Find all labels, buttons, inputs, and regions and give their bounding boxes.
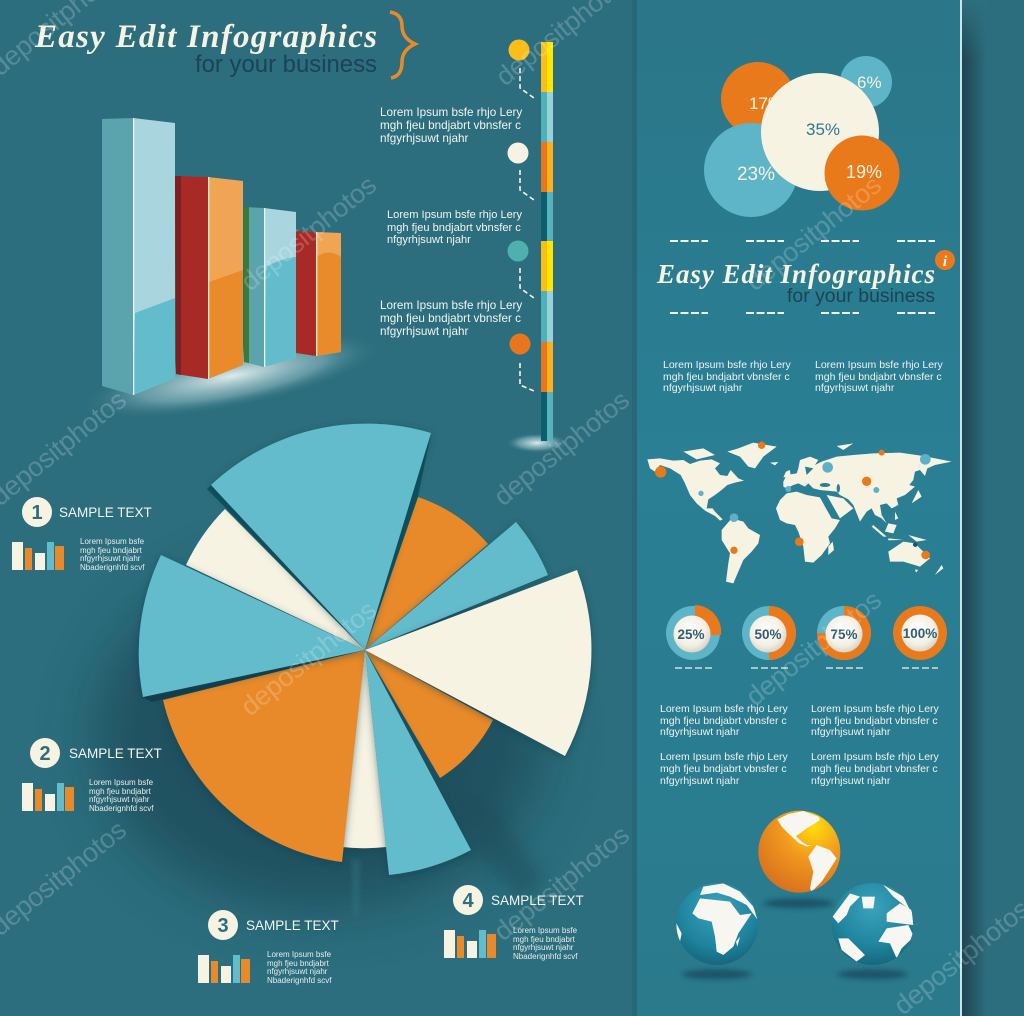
sample 2: mgh fjeu bndjabrt [89, 787, 152, 796]
donut 100% [893, 606, 947, 660]
bubble chart: 6% [857, 73, 882, 92]
panel text 2: Lorem Ipsum bsfe rhjo Lery [815, 359, 944, 371]
slice: top blue [211, 424, 431, 650]
panel text 3 [660, 703, 789, 738]
icon: info [935, 250, 955, 270]
panel text 6 [811, 751, 940, 787]
panel text 4 [811, 703, 940, 738]
timeline text 1 [380, 106, 522, 145]
sample 3: Nbaderignhfd scvf [267, 976, 332, 985]
timeline text 3: Lorem Ipsum bsfe rhjo Lery [380, 299, 522, 312]
donut 75% [817, 606, 871, 660]
sample 3: 3 [217, 915, 229, 937]
sample 3: Lorem Ipsum bsfe [267, 950, 332, 959]
slice: bottom blue [365, 650, 471, 875]
sample 2: 2 [39, 743, 51, 765]
sample 2: Lorem Ipsum bsfe [89, 778, 154, 787]
bar 4 [296, 231, 341, 356]
sample 4: 4 [462, 890, 474, 912]
title right: Easy Edit Infographics [656, 259, 935, 289]
timeline text 2 [387, 209, 522, 246]
pie shadow [95, 560, 545, 915]
globes [676, 811, 914, 979]
bubble chart [704, 56, 900, 217]
sample 2 [22, 738, 162, 813]
timeline text 3: nfgyrhjsuwt njahr [380, 325, 468, 338]
panel text 2 [815, 359, 944, 394]
bar 2 [175, 176, 243, 379]
title right [656, 259, 935, 307]
sample 4: mgh fjeu bndjabrt [513, 935, 576, 944]
watermarks: depositphotos [488, 820, 635, 947]
panel text 5: mgh fjeu bndjabrt vbnsfer c [660, 763, 787, 775]
bubble chart: 17% [749, 94, 783, 113]
sample 2: nfgyrhjsuwt njahr [89, 795, 150, 804]
globe: orange [758, 811, 840, 893]
panel text 1 [663, 359, 792, 394]
panel text 2: mgh fjeu bndjabrt vbnsfer c [815, 371, 942, 383]
sample 4 [444, 885, 584, 961]
right panel [632, 0, 988, 1016]
sample 1: nfgyrhjsuwt njahr [80, 554, 141, 563]
brace icon [390, 12, 415, 78]
timeline text 1: mgh fjeu bndjabrt vbnsfer c [380, 119, 521, 132]
sample 1: 1 [31, 502, 43, 524]
sample 1: Nbaderignhfd scvf [80, 563, 145, 572]
panel text 1: nfgyrhjsuwt njahr [663, 382, 743, 394]
timeline [505, 40, 569, 453]
panel text 6: mgh fjeu bndjabrt vbnsfer c [811, 763, 938, 775]
timeline bar [541, 42, 553, 441]
sample 4: Lorem Ipsum bsfe [513, 926, 578, 935]
bubble chart: 35% [806, 120, 840, 139]
panel text 3: mgh fjeu bndjabrt vbnsfer c [660, 715, 787, 727]
sample 2: Nbaderignhfd scvf [89, 804, 154, 813]
3D bar chart [74, 118, 390, 437]
sample 4: Nbaderignhfd scvf [513, 952, 578, 961]
donut 100%: 100% [903, 626, 937, 641]
watermarks: depositphotos [488, 385, 635, 512]
icon: info: i [943, 254, 948, 270]
watermarks: depositphotos [740, 585, 887, 712]
watermarks: depositphotos [235, 170, 382, 297]
panel text 6: nfgyrhjsuwt njahr [811, 775, 891, 787]
timeline text 3: mgh fjeu bndjabrt vbnsfer c [380, 312, 521, 325]
donut 25%: 25% [677, 627, 705, 642]
globe: left blue [676, 883, 758, 965]
sample 3: mgh fjeu bndjabrt [267, 959, 330, 968]
sample 1 [12, 497, 152, 572]
panel text 3: nfgyrhjsuwt njahr [660, 726, 740, 738]
watermarks: depositphotos [235, 595, 382, 722]
title left [34, 19, 377, 78]
map markers [655, 442, 931, 559]
timeline text 1: Lorem Ipsum bsfe rhjo Lery [380, 106, 522, 119]
title left: for your business [195, 51, 377, 78]
world map [647, 442, 952, 583]
panel text 5 [660, 751, 789, 787]
dashed rules [670, 241, 935, 313]
globe: right blue [832, 883, 914, 965]
panel text 1: mgh fjeu bndjabrt vbnsfer c [663, 371, 790, 383]
timeline text 2: Lorem Ipsum bsfe rhjo Lery [387, 209, 522, 221]
title left: Easy Edit Infographics [34, 19, 377, 55]
panel text 3: Lorem Ipsum bsfe rhjo Lery [660, 703, 789, 715]
timeline text 3 [380, 299, 522, 338]
sample 4: nfgyrhjsuwt njahr [513, 943, 574, 952]
watermarks: depositphotos [740, 170, 887, 297]
bubble chart: 19% [846, 162, 882, 182]
slice: right cream [365, 570, 591, 756]
sample 3: SAMPLE TEXT [246, 918, 339, 933]
sample 1: SAMPLE TEXT [59, 505, 152, 520]
donut dashes [675, 667, 938, 669]
panel text 5: Lorem Ipsum bsfe rhjo Lery [660, 751, 789, 763]
donut 75%: 75% [830, 627, 858, 642]
sample 1: Lorem Ipsum bsfe [80, 537, 145, 546]
panel text 5: nfgyrhjsuwt njahr [660, 775, 740, 787]
donut 25% [666, 605, 721, 660]
sample 3 [198, 910, 339, 985]
panel text 6: Lorem Ipsum bsfe rhjo Lery [811, 751, 940, 763]
panel text 2: nfgyrhjsuwt njahr [815, 382, 895, 394]
timeline text 2: nfgyrhjsuwt njahr [387, 234, 471, 246]
panel text 4: nfgyrhjsuwt njahr [811, 726, 891, 738]
timeline text 2: mgh fjeu bndjabrt vbnsfer c [387, 222, 521, 234]
bar 1 [102, 118, 175, 395]
donut 50% [742, 606, 796, 660]
panel text 1: Lorem Ipsum bsfe rhjo Lery [663, 359, 792, 371]
sample 2: SAMPLE TEXT [69, 746, 162, 761]
sample 1: mgh fjeu bndjabrt [80, 546, 143, 555]
bubble chart: 23% [737, 164, 775, 185]
panel text 4: Lorem Ipsum bsfe rhjo Lery [811, 703, 940, 715]
sample 4: SAMPLE TEXT [491, 893, 584, 908]
bar 3 [244, 207, 296, 367]
pie chart [139, 424, 591, 875]
sample 3: nfgyrhjsuwt njahr [267, 967, 328, 976]
timeline text 1: nfgyrhjsuwt njahr [380, 132, 468, 145]
timeline nodes [508, 40, 530, 354]
donut 50%: 50% [754, 627, 782, 642]
slice: left blue [139, 555, 365, 697]
panel text 4: mgh fjeu bndjabrt vbnsfer c [811, 715, 938, 727]
title right: for your business [787, 285, 935, 307]
